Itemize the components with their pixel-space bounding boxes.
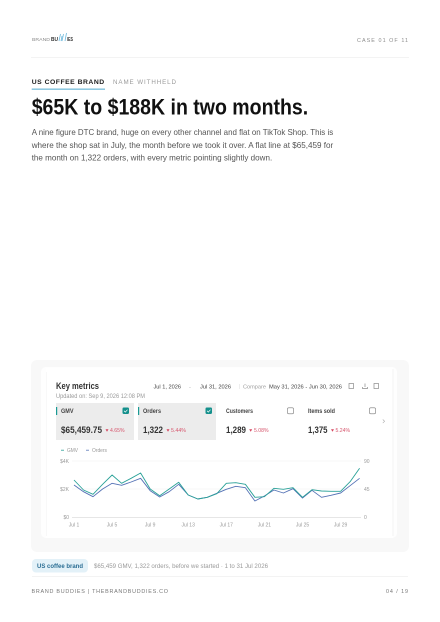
date axis labels: Jul 25	[296, 522, 309, 528]
intro paragraph: A nine figure DTC brand, huge on every other channel and flat on TikTok Shop. This is	[32, 128, 333, 137]
intro paragraph	[31, 128, 333, 163]
date axis labels: Jul 1	[69, 522, 79, 528]
page case label: CASE 01 OF 11	[357, 38, 408, 44]
date axis labels	[69, 522, 347, 528]
orders line	[74, 478, 360, 501]
metric tile: Orders: Orders	[143, 409, 162, 415]
date range: Jul 31, 2026	[200, 384, 231, 390]
left axis labels: $2K	[60, 487, 70, 493]
metric tile: Customers	[226, 408, 294, 435]
right axis labels: 45	[364, 487, 370, 493]
chart legend	[61, 448, 107, 454]
metric tile: Orders	[138, 403, 216, 440]
metric tile: GMV: GMV	[61, 409, 74, 415]
logo	[32, 33, 73, 43]
metric tile: GMV	[56, 403, 134, 440]
metric tile: Items sold: 5.24%	[336, 428, 351, 434]
eyebrow: brand	[32, 79, 105, 90]
date axis labels: Jul 5	[107, 522, 117, 528]
date axis labels: Jul 13	[182, 522, 195, 528]
footer page number: 04 / 19	[386, 589, 408, 595]
panel: key metrics card	[46, 368, 393, 538]
metric tile: GMV: 4.65%	[110, 428, 125, 434]
date axis labels: Jul 9	[145, 522, 156, 528]
card heading: Key metrics	[56, 381, 99, 391]
date range	[154, 384, 342, 390]
title: $65K to $188K in two months.	[32, 94, 308, 119]
logo: BRAND	[32, 37, 51, 42]
left axis labels: $0	[63, 515, 69, 521]
line chart: GMV and orders	[60, 459, 370, 528]
toolbar icons	[349, 384, 378, 388]
date range: Jul 1, 2026	[154, 384, 181, 390]
metric tile: Items sold: 1,375	[308, 425, 328, 435]
date range: May 31, 2026 - Jun 30, 2026	[269, 384, 342, 390]
right axis labels: 90	[364, 459, 370, 465]
metric tile: Items sold	[308, 408, 376, 435]
logo: IES	[67, 37, 73, 43]
chart legend: GMV	[67, 448, 79, 454]
logo: BU	[51, 37, 58, 43]
right axis labels	[364, 459, 370, 521]
metric tile: GMV: $65,459.75	[61, 425, 102, 435]
eyebrow: brand: US COFFEE BRAND	[32, 79, 104, 86]
metric tile: Customers: 5.08%	[254, 428, 269, 434]
date range: Compare	[243, 384, 266, 390]
metric tile: Customers: 1,289	[226, 425, 246, 435]
tag: US coffee brand	[32, 559, 88, 572]
metric tile: Orders: 1,322	[143, 425, 163, 435]
icon: next arrow	[383, 420, 385, 423]
date axis labels: Jul 21	[258, 522, 271, 528]
intro paragraph: where the shop sat in July, the month before we took it over. A flat line at $65,459 for	[31, 141, 333, 150]
date range: -	[189, 384, 191, 390]
panel: screenshot frame	[31, 360, 409, 552]
date axis labels: Jul 29	[334, 522, 347, 528]
intro paragraph: the month on 1,322 orders, with every metric pointing slightly down.	[32, 154, 272, 163]
eyebrow: name withheld: NAME WITHHELD	[113, 79, 177, 86]
footer brand: BRAND BUDDIES | THEBRANDBUDDIES.CO	[32, 589, 168, 595]
metric tile: Items sold: Items sold	[308, 409, 335, 415]
right axis labels: 0	[364, 515, 367, 521]
chart legend: Orders	[92, 448, 107, 454]
date axis labels: Jul 17	[220, 522, 233, 528]
metric tile: Customers: Customers	[226, 409, 254, 415]
left axis labels: $4K	[60, 459, 70, 465]
GMV line	[74, 468, 360, 499]
tag: US coffee brand: US coffee brand	[37, 563, 83, 570]
metric tile: Orders: 5.44%	[171, 428, 187, 434]
updated timestamp: Updated on: Sep 9, 2026 12:08 PM	[56, 394, 145, 400]
caption: $65,459 GMV, 1,322 orders, before we started · 1 to 31 Jul 2026	[94, 563, 268, 570]
left axis labels	[60, 459, 70, 521]
